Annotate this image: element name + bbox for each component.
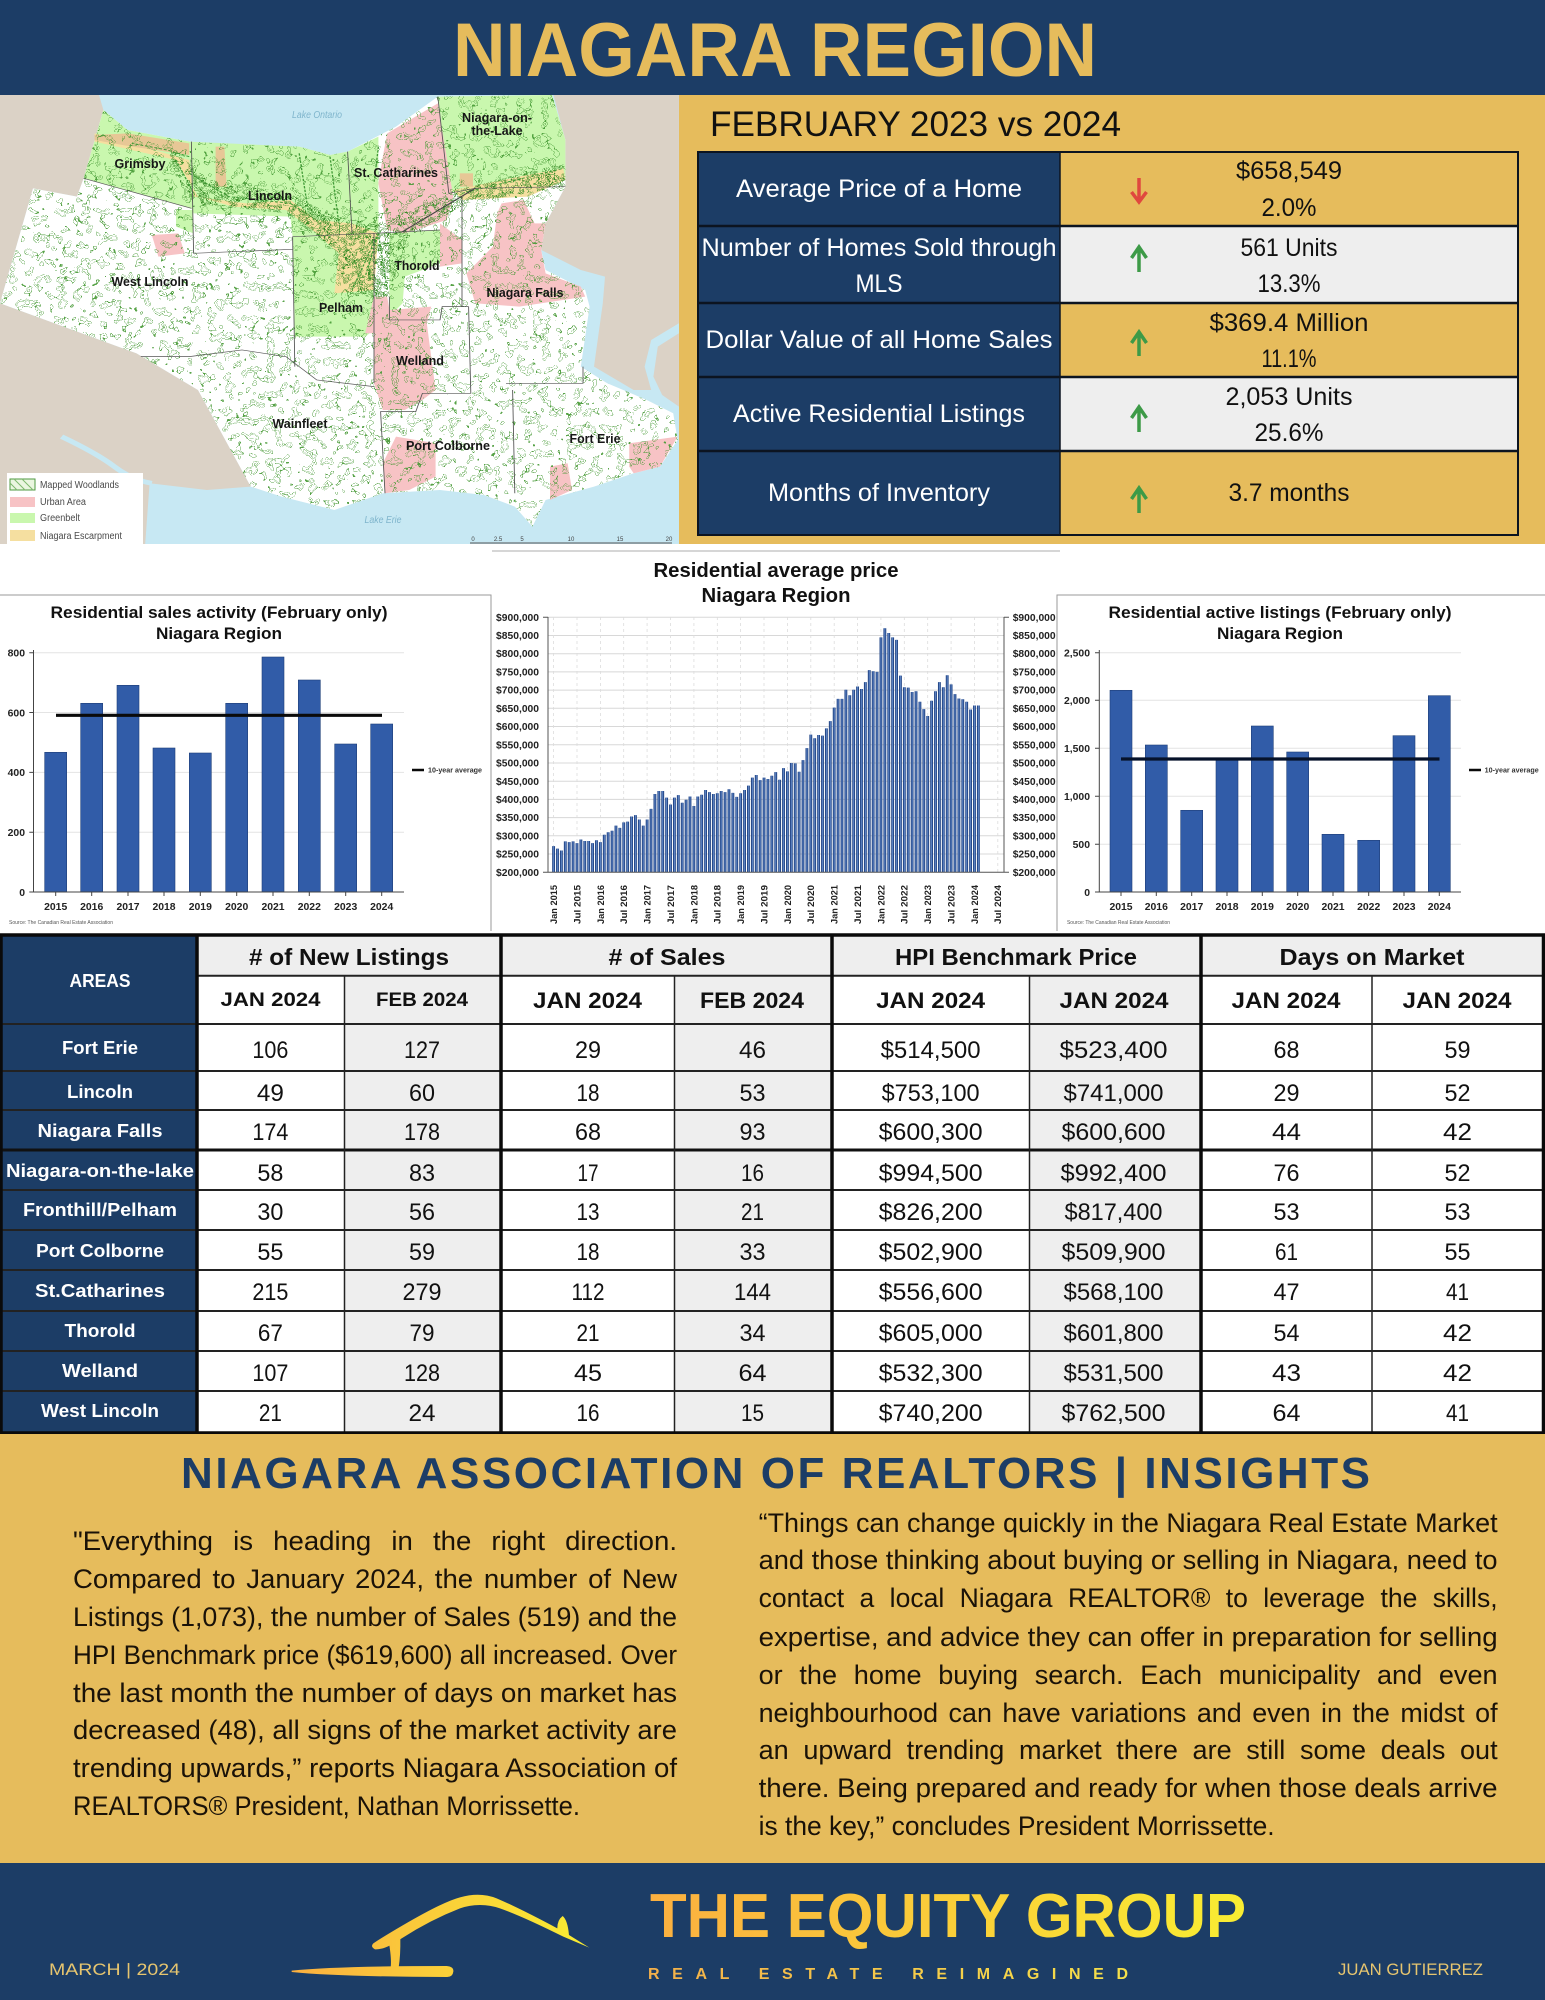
chart: residential average price: $550,000 xyxy=(496,740,539,752)
map place labels: West Lincoln xyxy=(112,274,189,289)
table values: $556,600 xyxy=(879,1279,983,1306)
table values: 53 xyxy=(1274,1199,1300,1226)
right quote: or the home buying search. Each municipality and even xyxy=(759,1660,1498,1690)
table values: $740,200 xyxy=(879,1400,983,1427)
right quote: “Things can change quickly in the Niagara Real Estate Market xyxy=(759,1508,1498,1538)
table values: 42 xyxy=(1443,1360,1472,1387)
table values: 16 xyxy=(741,1160,764,1187)
area names xyxy=(6,971,194,1421)
header banner xyxy=(0,0,1545,95)
chart: residential sales activity: 2017 xyxy=(116,902,140,913)
left quote: Listings (1,073), the number of Sales (519) and the xyxy=(73,1602,677,1632)
column group headings xyxy=(249,944,1465,970)
column group headings: # of Sales xyxy=(608,944,726,970)
chart: residential sales activity: 800 xyxy=(8,648,25,660)
map place labels: Fort Erie xyxy=(570,431,620,446)
woodland texture xyxy=(0,95,679,544)
table values: 67 xyxy=(258,1320,283,1347)
chart: residential average price: $300,000 xyxy=(1013,832,1056,842)
map place labels: Lincoln xyxy=(248,188,292,203)
table values: 21 xyxy=(576,1320,600,1347)
table values: 61 xyxy=(1275,1239,1298,1266)
chart: residential active listings: 0 xyxy=(1084,888,1090,899)
map scale bar: 10 xyxy=(568,537,575,543)
chart: residential active listings: 2024 xyxy=(1428,902,1451,913)
area names: Fort Erie xyxy=(62,1038,138,1058)
table values: 64 xyxy=(738,1360,766,1387)
table values: $600,300 xyxy=(879,1119,983,1146)
row values: 25.6% xyxy=(1254,419,1324,447)
table values: 279 xyxy=(402,1279,442,1306)
map place labels: Niagara-on- xyxy=(462,110,532,125)
table values: 60 xyxy=(409,1080,435,1107)
table values: 53 xyxy=(740,1080,766,1107)
panel: February 2023 vs 2024 summary xyxy=(679,95,1545,544)
area names: West Lincoln xyxy=(41,1401,159,1421)
chart: residential average price: $550,000 xyxy=(1013,740,1056,752)
table values: 29 xyxy=(575,1037,601,1064)
table values: 55 xyxy=(1444,1239,1470,1266)
chart: residential average price: $600,000 xyxy=(1013,722,1056,733)
month sub-headings: JAN 2024 xyxy=(1402,988,1512,1013)
area names: Lincoln xyxy=(67,1082,133,1102)
map of Niagara Region: Lake Erie xyxy=(364,515,402,526)
table values: 13 xyxy=(576,1199,600,1226)
map place labels: the-Lake xyxy=(472,123,522,138)
right quote: is the key,” concludes President Morrissette. xyxy=(759,1811,1275,1841)
chart: residential sales activity: 2024 xyxy=(370,902,393,913)
row labels: Active Residential Listings xyxy=(733,400,1025,428)
icon: green up arrow xyxy=(1132,332,1146,356)
chart: residential active listings: 2,500 xyxy=(1064,648,1090,660)
map place labels: Wainfleet xyxy=(272,416,328,431)
price chart date labels: Jul 2020 xyxy=(806,885,817,924)
chart: residential active listings: 2020 xyxy=(1286,902,1309,913)
map place labels: Port Colborne xyxy=(406,438,490,453)
table values: 33 xyxy=(740,1239,766,1266)
table values: 29 xyxy=(1274,1080,1300,1107)
chart: residential active listings: 2018 xyxy=(1215,902,1239,913)
left quote: the last month the number of days on market has xyxy=(73,1678,677,1708)
map of Niagara Region xyxy=(0,95,679,544)
chart: residential active listings: 2019 xyxy=(1251,902,1274,913)
table values: $568,100 xyxy=(1064,1279,1164,1306)
table values: 18 xyxy=(576,1239,600,1266)
table values: 52 xyxy=(1444,1080,1470,1107)
table values: $514,500 xyxy=(881,1037,981,1064)
table values: 45 xyxy=(574,1360,602,1387)
table values: 93 xyxy=(740,1119,766,1146)
table values: 17 xyxy=(578,1160,598,1187)
right quote: expertise, and advice they can offer in preparation for selling xyxy=(759,1622,1498,1652)
panel: insights xyxy=(0,1434,1545,1863)
table values: $753,100 xyxy=(882,1080,980,1107)
table values: 47 xyxy=(1274,1279,1300,1306)
table values: $531,500 xyxy=(1064,1360,1164,1387)
sales bars xyxy=(45,657,393,892)
price chart date labels: Jan 2024 xyxy=(970,884,981,924)
table values: 21 xyxy=(741,1199,764,1226)
footer xyxy=(0,1863,1545,2000)
map legend: Niagara Escarpment xyxy=(40,531,122,542)
price chart date labels: Jan 2016 xyxy=(596,885,607,924)
listings bars xyxy=(1110,690,1450,892)
row values: 3.7 months xyxy=(1228,479,1350,507)
price chart date labels: Jul 2023 xyxy=(946,885,958,924)
table values: $817,400 xyxy=(1064,1199,1162,1226)
icon: green up arrow xyxy=(1132,247,1146,272)
chart: residential active listings: Niagara Region xyxy=(1217,624,1343,643)
table values: 15 xyxy=(741,1400,764,1427)
table values: 112 xyxy=(572,1279,604,1306)
title: NIAGARA REGION xyxy=(453,8,1097,93)
area names: AREAS xyxy=(70,971,130,991)
map legend: Urban Area xyxy=(40,497,86,508)
table values: 76 xyxy=(1274,1160,1300,1187)
chart: residential active listings: 2023 xyxy=(1392,902,1416,913)
chart: residential sales activity: 2015 xyxy=(44,902,67,913)
chart: residential average price xyxy=(492,551,1060,924)
chart: residential average price: $350,000 xyxy=(496,813,539,824)
chart: residential active listings xyxy=(1057,595,1545,931)
table values: 178 xyxy=(404,1119,440,1146)
table values: 107 xyxy=(252,1360,288,1387)
chart: residential average price: $750,000 xyxy=(1013,668,1056,678)
table values: $762,500 xyxy=(1062,1400,1166,1427)
table values: 79 xyxy=(410,1320,434,1347)
table values: 49 xyxy=(257,1080,284,1107)
price chart date labels: Jan 2015 xyxy=(549,884,560,924)
chart: residential average price: $850,000 xyxy=(496,631,539,642)
row labels: MLS xyxy=(856,270,902,298)
left quote: "Everything is heading in the right direction. xyxy=(73,1526,677,1556)
chart: residential average price: $350,000 xyxy=(1013,813,1056,824)
chart: residential sales activity: Residential sales activity (February only) xyxy=(50,603,388,622)
chart: residential sales activity: 10-year average xyxy=(428,768,482,774)
price chart date labels: Jan 2018 xyxy=(689,885,700,924)
table values: $605,000 xyxy=(879,1320,983,1347)
chart: residential active listings: 1,000 xyxy=(1064,792,1090,803)
chart: residential active listings: 500 xyxy=(1073,840,1090,851)
chart: residential active listings: 10-year average xyxy=(1485,768,1539,774)
chart: residential average price: $700,000 xyxy=(1013,686,1056,696)
row labels: Number of Homes Sold through xyxy=(702,234,1056,262)
table values: 58 xyxy=(257,1160,283,1187)
chart: residential average price: $850,000 xyxy=(1013,631,1056,642)
price chart date labels: Jan 2019 xyxy=(736,885,747,924)
area names: Fronthill/Pelham xyxy=(23,1200,177,1220)
chart: residential average price: $900,000 xyxy=(1013,613,1056,624)
table values: 128 xyxy=(404,1360,440,1387)
price chart date labels: Jul 2018 xyxy=(713,885,724,924)
column group headings: # of New Listings xyxy=(249,944,449,970)
row values: $658,549 xyxy=(1236,157,1342,185)
map place labels: Thorold xyxy=(394,258,440,273)
table values: 30 xyxy=(257,1199,283,1226)
chart: residential sales activity: 2020 xyxy=(225,902,248,913)
price chart date labels: Jul 2021 xyxy=(853,884,864,924)
month sub-headings: JAN 2024 xyxy=(876,988,986,1013)
chart: residential sales activity: 600 xyxy=(8,708,25,719)
chart: residential sales activity: 2018 xyxy=(152,902,176,913)
map of Niagara Region: Lake Ontario xyxy=(292,110,342,121)
row values: $369.4 Million xyxy=(1210,309,1368,337)
area names: Port Colborne xyxy=(36,1241,164,1261)
table values: 127 xyxy=(404,1037,440,1064)
row labels: Months of Inventory xyxy=(768,479,990,507)
price chart date labels: Jul 2024 xyxy=(993,884,1004,924)
month sub-headings: FEB 2024 xyxy=(376,990,468,1011)
chart: residential average price: $450,000 xyxy=(496,777,539,788)
map place labels: Welland xyxy=(396,353,444,368)
map place labels: Niagara Falls xyxy=(486,285,564,300)
month sub-headings: JAN 2024 xyxy=(220,990,321,1011)
icon: green up arrow xyxy=(1132,407,1146,432)
table values: 41 xyxy=(1446,1279,1469,1306)
table values: 144 xyxy=(734,1279,771,1306)
map scale bar: 15 xyxy=(617,537,624,543)
chart: residential average price: Residential average price xyxy=(654,560,898,582)
table values: $502,900 xyxy=(879,1239,983,1266)
chart: residential average price: $500,000 xyxy=(1013,758,1056,770)
chart: residential average price: $200,000 xyxy=(496,868,539,879)
month sub-headings xyxy=(220,988,1512,1013)
month sub-headings: JAN 2024 xyxy=(1232,988,1341,1013)
icon: house logo xyxy=(292,1895,589,1977)
left quote: decreased (48), all signs of the market activity are xyxy=(73,1715,677,1745)
table values: 42 xyxy=(1443,1119,1472,1146)
chart: residential average price: $200,000 xyxy=(1013,868,1056,879)
row labels xyxy=(702,175,1056,507)
chart: residential active listings: 2016 xyxy=(1145,902,1168,913)
chart: residential active listings: Residential active listings (February only) xyxy=(1108,603,1452,622)
map legend: Mapped Woodlands xyxy=(40,480,119,491)
row labels: Average Price of a Home xyxy=(736,175,1022,203)
panel heading: FEBRUARY 2023 vs 2024 xyxy=(710,105,1121,144)
right quote: contact a local Niagara REALTOR® to leverage the skills, xyxy=(759,1583,1498,1613)
row values xyxy=(1210,157,1368,507)
chart: residential active listings: 2021 xyxy=(1321,902,1345,913)
chart: residential average price: $250,000 xyxy=(496,850,539,860)
chart: residential active listings: 2017 xyxy=(1180,902,1203,913)
right quote: there. Being prepared and ready for when those deals arrive xyxy=(759,1773,1498,1803)
table values: 56 xyxy=(409,1199,435,1226)
table values: 64 xyxy=(1272,1400,1300,1427)
table values: $994,500 xyxy=(879,1160,983,1187)
table values: 106 xyxy=(252,1037,288,1064)
chart: residential average price: $900,000 xyxy=(496,613,539,624)
table values: 41 xyxy=(1446,1400,1469,1427)
chart: residential sales activity xyxy=(0,595,491,931)
chart: residential sales activity: 2019 xyxy=(189,902,212,913)
chart: residential average price: $650,000 xyxy=(496,704,539,715)
table values: 21 xyxy=(259,1400,282,1427)
left quote xyxy=(73,1526,678,1821)
table values: 55 xyxy=(257,1239,283,1266)
chart: residential sales activity: 2023 xyxy=(334,902,357,913)
chart: residential average price: $700,000 xyxy=(496,686,539,696)
chart: residential active listings: 2,000 xyxy=(1064,696,1090,707)
chart: residential sales activity: 2022 xyxy=(298,902,321,913)
price chart date labels: Jul 2022 xyxy=(900,885,911,924)
table values: 68 xyxy=(575,1119,601,1146)
chart: residential active listings: 1,500 xyxy=(1064,744,1090,755)
map place labels: St. Catharines xyxy=(354,165,438,180)
chart: residential average price: $750,000 xyxy=(496,668,539,678)
footer author: JUAN GUTIERREZ xyxy=(1338,1960,1483,1979)
brand name: THE EQUITY GROUP xyxy=(650,1882,1246,1951)
table values: 44 xyxy=(1272,1119,1301,1146)
map scale bar: 0 xyxy=(471,537,475,543)
map legend: Greenbelt xyxy=(40,513,80,524)
right quote: an upward trending market there are still some deals out xyxy=(759,1735,1498,1765)
month sub-headings: FEB 2024 xyxy=(700,988,805,1013)
column group headings: Days on Market xyxy=(1280,944,1465,970)
right quote: neighbourhood can have variations and even in the midst of xyxy=(759,1698,1498,1728)
table values: 59 xyxy=(1444,1037,1470,1064)
table values: $741,000 xyxy=(1064,1080,1164,1107)
chart: residential active listings: Source: The Canadian Real Estate Association xyxy=(1067,920,1170,926)
footer date: MARCH | 2024 xyxy=(49,1960,180,1979)
chart: residential sales activity: 2021 xyxy=(261,902,285,913)
table values xyxy=(252,1037,1472,1427)
icon: green up arrow xyxy=(1132,488,1146,513)
price chart date labels: Jul 2016 xyxy=(619,885,630,924)
chart: residential average price: $450,000 xyxy=(1013,777,1056,788)
left quote: trending upwards,” reports Niagara Association of xyxy=(73,1753,678,1783)
table values: 174 xyxy=(252,1119,288,1146)
row values: 561 Units xyxy=(1240,234,1338,262)
table values: 54 xyxy=(1274,1320,1300,1347)
price chart date labels: Jan 2020 xyxy=(783,885,794,924)
icon: red down arrow xyxy=(1132,178,1146,202)
row values: 2.0% xyxy=(1262,194,1316,222)
table values: 53 xyxy=(1444,1199,1470,1226)
map scale bar xyxy=(470,537,673,543)
price chart date labels: Jan 2021 xyxy=(830,884,841,924)
insights heading: NIAGARA ASSOCIATION OF REALTORS | INSIGHTS xyxy=(181,1449,1370,1499)
chart: residential sales activity: 200 xyxy=(8,828,25,839)
chart: residential average price: $500,000 xyxy=(496,758,539,770)
table values: 59 xyxy=(409,1239,435,1266)
table values: 24 xyxy=(408,1400,436,1427)
area names: Niagara-on-the-lake xyxy=(6,1161,194,1181)
table values: $600,600 xyxy=(1062,1119,1166,1146)
left quote: REALTORS® President, Nathan Morrissette. xyxy=(73,1791,580,1821)
table values: 42 xyxy=(1443,1320,1472,1347)
map scale bar: 2.5 xyxy=(494,537,503,543)
row values: 13.3% xyxy=(1258,270,1320,298)
map scale bar: 5 xyxy=(520,537,524,543)
chart: residential active listings: 2015 xyxy=(1109,902,1133,913)
table values: 52 xyxy=(1444,1160,1470,1187)
price chart date labels: Jan 2023 xyxy=(923,885,934,924)
table values: 46 xyxy=(739,1037,766,1064)
chart: residential sales activity: Source: The Canadian Real Estate Association xyxy=(9,920,113,926)
chart: residential average price: Niagara Region xyxy=(702,585,850,607)
month sub-headings: JAN 2024 xyxy=(1060,988,1169,1013)
price chart date labels: Jul 2015 xyxy=(572,884,583,924)
chart: residential sales activity: 400 xyxy=(8,768,25,779)
map legend xyxy=(7,473,143,544)
chart: residential average price: $650,000 xyxy=(1013,704,1056,715)
row values: 2,053 Units xyxy=(1226,383,1352,411)
map scale bar: 20 xyxy=(666,537,673,543)
area statistics table xyxy=(0,934,1545,1434)
table values: $532,300 xyxy=(879,1360,983,1387)
map place labels xyxy=(112,110,620,453)
price chart date labels: Jul 2017 xyxy=(666,885,677,924)
column group headings: HPI Benchmark Price xyxy=(895,944,1137,970)
map place labels: Grimsby xyxy=(114,156,166,171)
left quote: Compared to January 2024, the number of New xyxy=(73,1564,678,1594)
price chart date labels: Jan 2017 xyxy=(642,885,654,924)
price chart date labels: Jan 2022 xyxy=(876,885,887,924)
chart: residential average price: $800,000 xyxy=(496,649,539,660)
table values: 43 xyxy=(1272,1360,1301,1387)
table values: $826,200 xyxy=(879,1199,983,1226)
table values: $523,400 xyxy=(1060,1037,1168,1064)
price chart date labels: Jul 2019 xyxy=(759,885,770,924)
area names: Thorold xyxy=(64,1321,136,1341)
price chart date labels xyxy=(549,884,1004,924)
area names: St.Catharines xyxy=(35,1281,165,1301)
chart: residential average price: $800,000 xyxy=(1013,649,1056,660)
right quote: and those thinking about buying or selling in Niagara, need to xyxy=(759,1545,1498,1575)
summary table xyxy=(698,152,1518,535)
table values: $509,900 xyxy=(1062,1239,1166,1266)
table values: $992,400 xyxy=(1060,1160,1166,1187)
chart: residential sales activity: 2016 xyxy=(80,902,103,913)
chart: residential average price: $600,000 xyxy=(496,722,539,733)
month sub-headings: JAN 2024 xyxy=(533,988,643,1013)
left quote: HPI Benchmark price ($619,600) all increased. Over xyxy=(73,1640,677,1670)
price bars xyxy=(554,628,978,872)
brand tagline: REAL ESTATE REIMAGINED xyxy=(648,1966,1128,1983)
table values: 16 xyxy=(576,1400,600,1427)
chart: residential average price: $400,000 xyxy=(1013,795,1056,806)
row values: 11.1% xyxy=(1262,345,1316,373)
area names: Niagara Falls xyxy=(38,1121,162,1141)
row labels: Dollar Value of all Home Sales xyxy=(706,326,1052,354)
right quote xyxy=(759,1508,1498,1841)
map place labels: Pelham xyxy=(319,300,363,315)
chart: residential average price: $400,000 xyxy=(496,795,539,806)
chart: residential average price: $250,000 xyxy=(1013,850,1056,860)
table values: $601,800 xyxy=(1064,1320,1164,1347)
table values: 215 xyxy=(252,1279,288,1306)
chart: residential sales activity: 0 xyxy=(19,888,25,899)
chart: residential average price: $300,000 xyxy=(496,832,539,842)
table values: 83 xyxy=(409,1160,435,1187)
chart: residential sales activity: Niagara Region xyxy=(156,624,282,643)
table values: 34 xyxy=(740,1320,766,1347)
area names: Welland xyxy=(62,1361,138,1381)
table values: 18 xyxy=(576,1080,600,1107)
table values: 68 xyxy=(1274,1037,1300,1064)
chart: residential active listings: 2022 xyxy=(1357,902,1380,913)
